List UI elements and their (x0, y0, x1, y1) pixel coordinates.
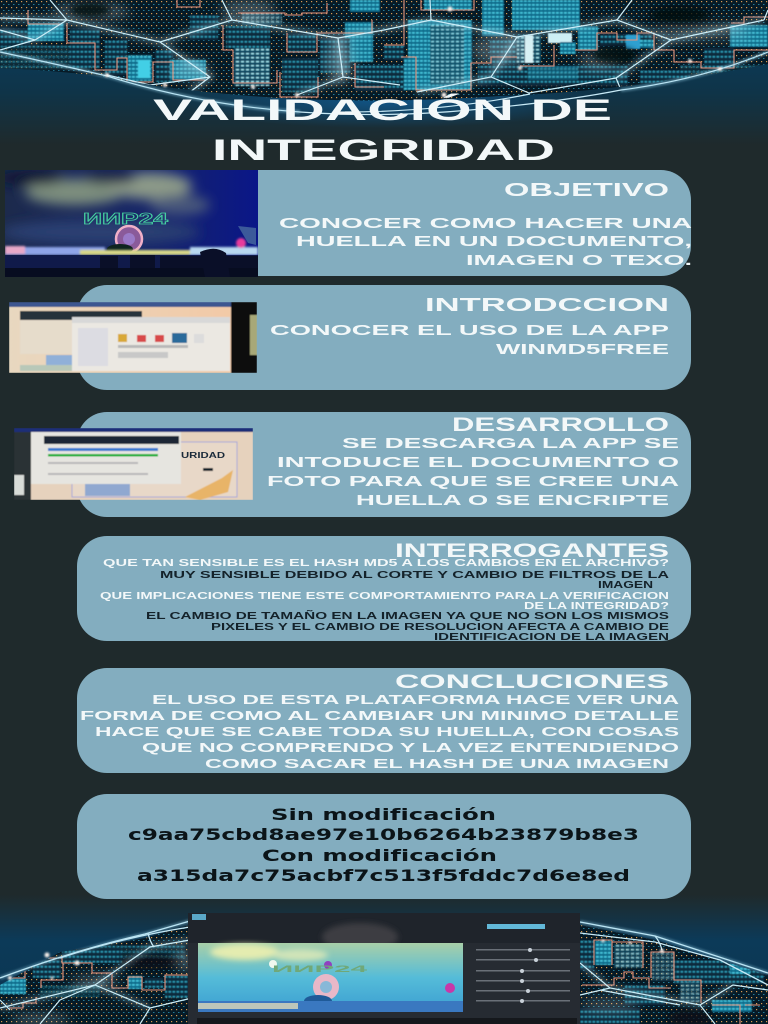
heading: desarrollo: DESARROLLO (452, 415, 669, 436)
text: desarrollo: FOTO PARA QUE SE CREE UNA (267, 474, 680, 490)
text: interrogantes: MUY SENSIBLE DEBIDO AL CORTE Y CAMBIO DE FILTROS DE LA (160, 570, 669, 581)
top city banner (0, 0, 768, 130)
bottom city banner (0, 895, 768, 1024)
photo: file explorer screenshot (9, 302, 257, 373)
text: introduccion: CONOCER EL USO DE LA APP (270, 323, 670, 339)
text: interrogantes: DE LA INTEGRIDAD? (524, 601, 669, 612)
photo: festival at night (0, 170, 258, 277)
panel: desarrollo (14, 412, 691, 517)
photo: winmd5free screenshot (14, 428, 253, 500)
panel: objetivo (0, 170, 693, 277)
text: objetivo: HUELLA EN UN DOCUMENTO, (296, 234, 692, 250)
text: conclusiones: FORMA DE COMO AL CAMBIAR UN MINIMO DETALLE (80, 708, 680, 723)
text: conclusiones: HACE QUE SE CABE TODA SU HUELLA, CON COSAS (95, 724, 680, 739)
heading: introduccion: INTRODCCION (425, 295, 669, 315)
text: objetivo: IMAGEN O TEXO. (466, 253, 692, 269)
text: conclusiones: EL USO DE ESTA PLATAFORMA HACE VER UNA (152, 692, 680, 707)
text: interrogantes: EL CAMBIO DE TAMAÑO EN LA IMAGEN YA QUE NO SON LOS MISMOS (146, 609, 669, 622)
text: interrogantes: PIXELES Y EL CAMBIO DE RESOLUCION AFECTA A CAMBIO DE (211, 622, 669, 633)
photo: winmd5free screenshot: URIDAD (181, 451, 225, 460)
panel: introduccion (9, 285, 691, 390)
text: interrogantes (100, 558, 669, 643)
text: interrogantes: QUE TAN SENSIBLE ES EL HASH MD5 A LOS CAMBIOS EN EL ARCHIVO? (103, 558, 669, 569)
text: hash original: c9aa75cbd8ae97e10b6264b23879b8e3 (128, 825, 639, 844)
text: sin modificacion: Sin modificación (271, 805, 496, 824)
panel: hash values (77, 794, 691, 899)
title: VALIDACIÓN DE (153, 93, 612, 127)
text: conclusiones: COMO SACAR EL HASH DE UNA IMAGEN (205, 756, 669, 771)
text: desarrollo: SE DESCARGA LA APP SE (342, 436, 680, 452)
heading: conclusiones: CONCLUCIONES (395, 672, 669, 693)
text: desarrollo: INTODUCE EL DOCUMENTO O (277, 455, 679, 471)
panel: interrogantes (77, 536, 691, 643)
heading: objetivo: OBJETIVO (504, 180, 669, 200)
text: objetivo: CONOCER COMO HACER UNA (279, 216, 693, 232)
text: desarrollo: HUELLA O SE ENCRIPTE (356, 493, 670, 509)
heading: interrogantes: INTERROGANTES (395, 541, 669, 562)
text: conclusiones (80, 692, 680, 771)
text: interrogantes: QUE IMPLICACIONES TIENE ESTE COMPORTAMIENTO PARA LA VERIFICACION (100, 591, 669, 602)
text: hash modificado: a315da7c75acbf7c513f5fddc7d6e8ed (137, 866, 630, 885)
title: INTEGRIDAD (212, 134, 555, 167)
text: interrogantes: IMAGEN (598, 580, 653, 591)
text: conclusiones: QUE NO COMPRENDO Y LA VEZ ENTENDIENDO (142, 740, 679, 755)
photo: festival at night: ИИР24 (83, 211, 168, 228)
photo: image editor screenshot (188, 913, 580, 1024)
photo: image editor screenshot: ИИР24 (272, 964, 367, 974)
text: desarrollo (267, 436, 680, 509)
text: introduccion (270, 323, 670, 358)
text: con modificacion: Con modificación (262, 846, 497, 865)
text: objetivo (279, 216, 693, 269)
title (153, 93, 612, 167)
text: introduccion: WINMD5FREE (496, 342, 670, 358)
text: interrogantes: IDENTIFICACION DE LA IMAGEN (434, 632, 669, 643)
panel: conclusiones (77, 668, 691, 773)
